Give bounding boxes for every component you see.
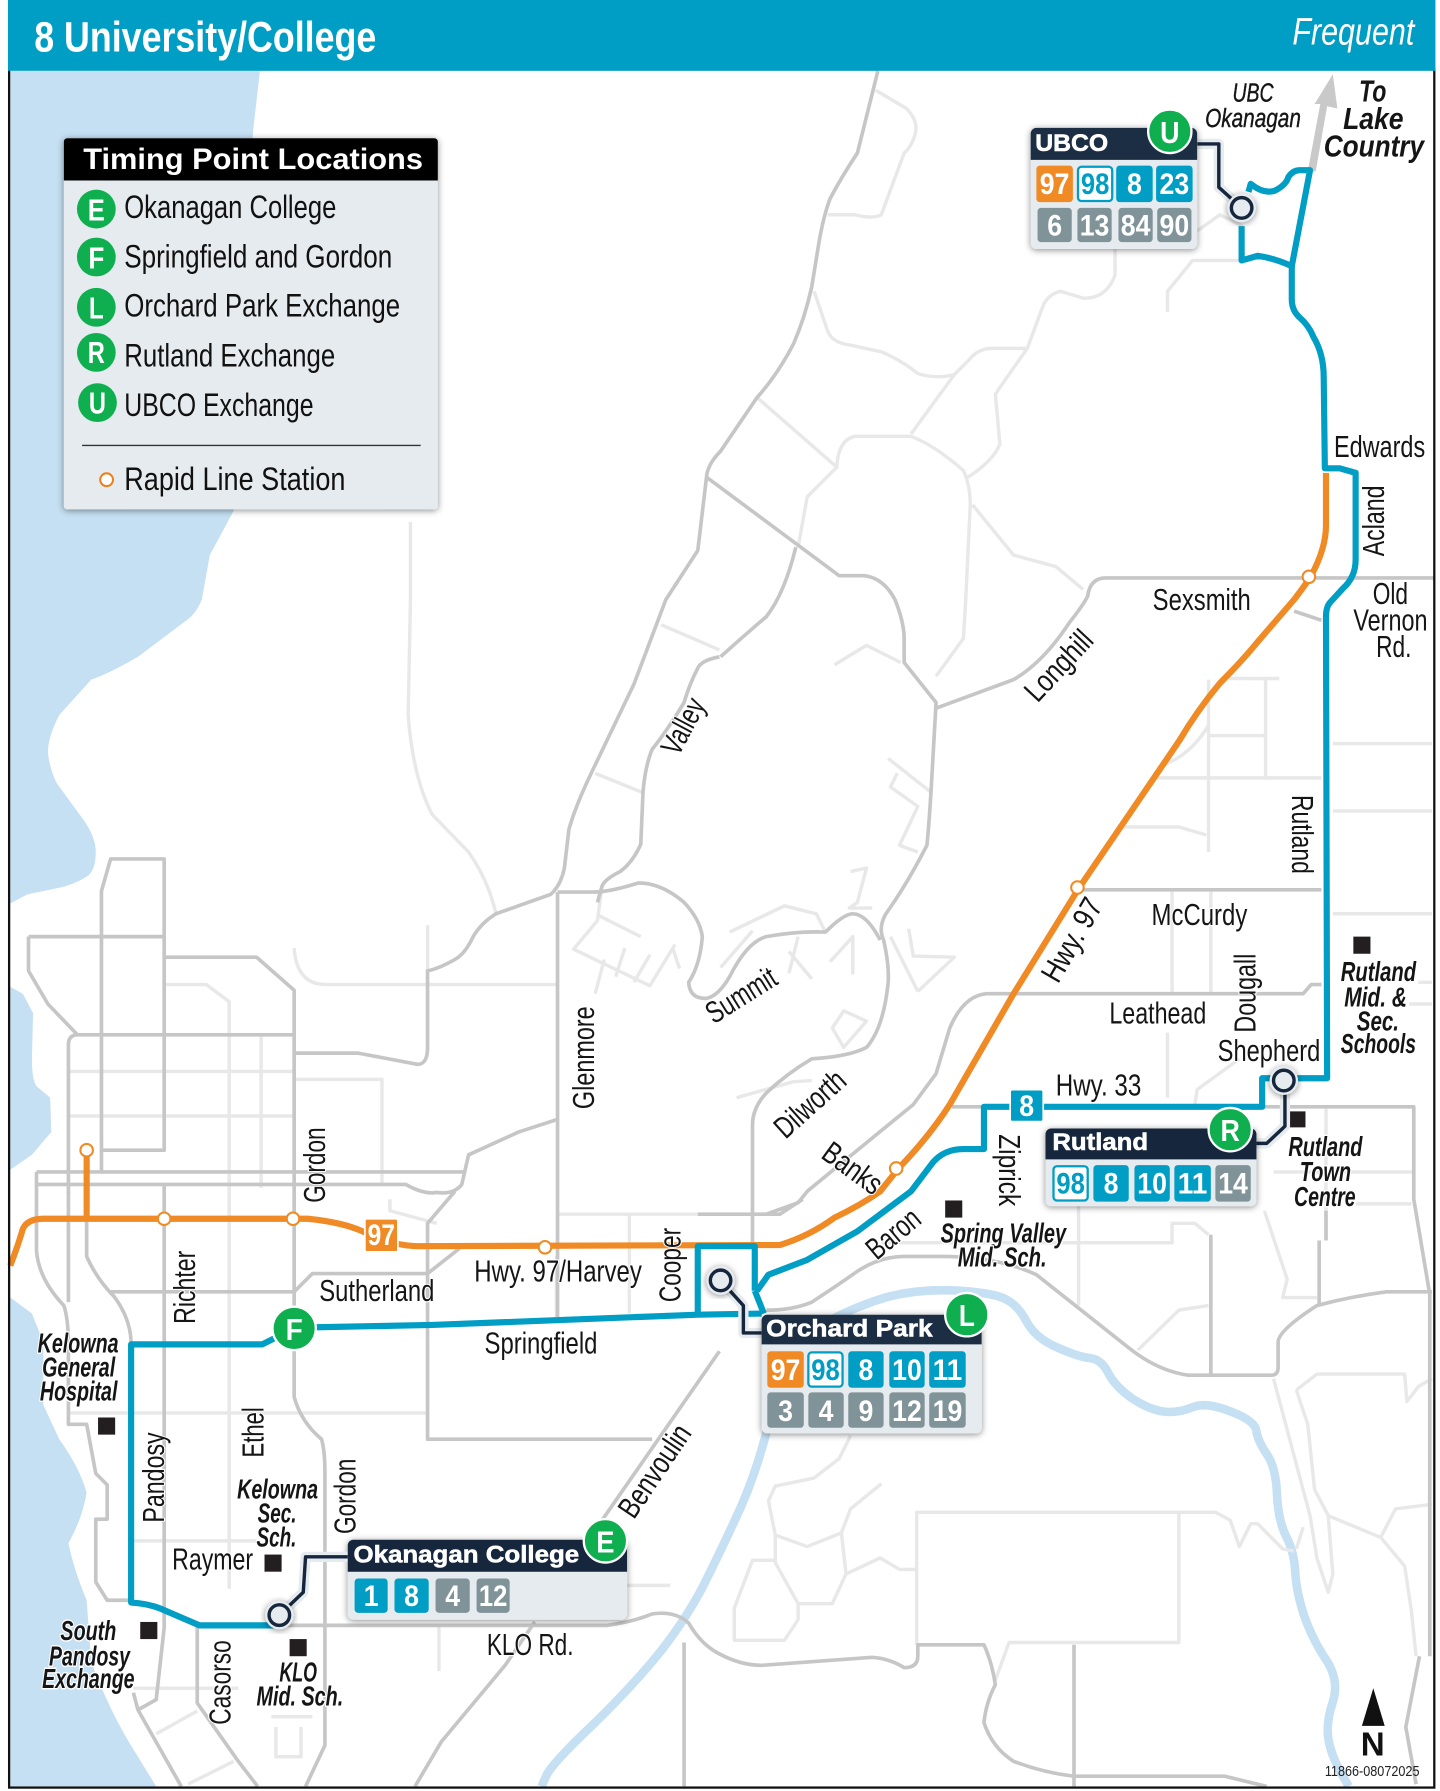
Rutland Town Centre [1288,1111,1363,1212]
service level: Frequent [1292,11,1416,53]
To Lake Country [1324,74,1426,163]
timing point badge R [1209,1108,1252,1151]
Banks: Banks [816,1134,890,1202]
arrow: to Lake Country [1308,74,1337,171]
South Pandosy Exchange [42,1615,157,1694]
Hwy. 97/Harvey: Hwy. 97/Harvey [474,1254,642,1289]
UBC Okanagan: UBC [1232,78,1274,108]
callout: UBCO [1031,110,1256,249]
timing point badge U [1148,110,1191,153]
legend panel: Timing Point Locations [64,138,438,509]
north arrow [1361,1688,1385,1764]
route 97 rapid line (orange) [10,473,1326,1266]
Glenmore: Glenmore [566,1006,601,1109]
route 8 line (blue) [131,170,1356,1625]
Baron: Baron [859,1201,928,1266]
callout: UBCO: 6 [1047,209,1062,242]
legend entry U: U [89,385,106,420]
legend entry R: Rutland Exchange [124,338,335,374]
legend entry R [77,333,335,374]
callout: Orchard Park: 8 [859,1354,873,1387]
Rutland Town Centre: Rutland [1288,1131,1363,1162]
KLO Middle School [257,1639,343,1711]
callout: Orchard Park: 11 [933,1354,962,1387]
Benvoulin: Benvoulin [611,1418,698,1524]
Kelowna General Hospital: Hospital [40,1375,118,1406]
KLO Middle School: Mid. Sch. [257,1680,343,1711]
callout: Orchard Park: 3 [778,1395,793,1428]
callout name: Okanagan College [353,1542,579,1569]
Spring Valley Middle School: Mid. Sch. [958,1242,1047,1273]
callout: Okanagan College: 8 [404,1580,419,1613]
callout: Orchard Park: 98 [811,1354,840,1387]
Kelowna General Hospital: General [42,1351,116,1382]
callout: Rutland [1046,1066,1298,1206]
Spring Valley Middle School: Spring Valley [941,1218,1067,1249]
timing point badge E: E [596,1524,615,1559]
legend entry L: L [89,291,104,326]
street labels [136,429,1427,1725]
Cooper: Cooper [653,1228,688,1302]
Summit: Summit [699,959,783,1031]
Kelowna General Hospital [38,1327,119,1435]
Hwy. 97: Hwy. 97 [1034,891,1110,988]
callout: UBCO: 8 [1127,168,1142,201]
To Lake Country: Country [1324,128,1426,163]
legend entry: rapid line station: Rapid Line Station [124,461,345,497]
callout: Okanagan College: 12 [479,1580,507,1613]
callout: UBCO: 98 [1081,168,1109,201]
Dilworth: Dilworth [767,1063,853,1145]
Rutland Town Centre: Centre [1294,1181,1356,1212]
callout: Orchard Park [706,1266,989,1433]
Old Vernon Rd. [1353,576,1427,664]
callout: Orchard Park: 4 [819,1395,834,1428]
callout: Orchard Park: 97 [771,1354,800,1387]
Casorso: Casorso [202,1640,237,1725]
Rutland Mid. and Sec. Schools [1341,937,1417,1059]
timing point badge F on route: F [286,1312,303,1347]
route 8 marker [1010,1090,1043,1123]
callout: Okanagan College: 1 [364,1580,379,1613]
timing point badge L: L [959,1298,975,1333]
callout: Okanagan College: 4 [445,1580,460,1613]
Gordon north: Gordon [297,1127,332,1203]
Acland: Acland [1356,485,1391,556]
Rutland Mid. and Sec. Schools: Mid. & [1344,981,1407,1012]
timing point badge L [945,1293,989,1336]
Ethel: Ethel [235,1407,270,1457]
Spring Valley Middle School [941,1200,1067,1273]
callout: Rutland: 98 [1056,1168,1085,1201]
callout: UBCO: 97 [1040,168,1069,201]
Ziprick: Ziprick [992,1134,1027,1207]
header bar [8,0,1435,71]
Old Vernon Rd.: Rd. [1376,629,1411,664]
legend entry E [77,189,336,228]
legend entry U [78,383,314,423]
legend entry F: Springfield and Gordon [124,238,392,274]
callout: Rutland: 8 [1104,1168,1118,1201]
Rutland Town Centre: Town [1300,1156,1351,1187]
To Lake Country: Lake [1343,101,1404,136]
Kelowna Secondary School: Sec. [258,1498,296,1529]
legend entry U: UBCO Exchange [124,387,314,423]
route 8 marker: 8 [1019,1090,1034,1123]
legend entry L [77,287,400,327]
McCurdy: McCurdy [1152,897,1248,932]
Shepherd: Shepherd [1218,1033,1320,1068]
Rutland road: Rutland [1285,795,1320,874]
callout: Orchard Park: 9 [859,1395,873,1428]
legend entry E: Okanagan College [124,189,336,225]
KLO Middle School: KLO [279,1656,317,1687]
Richter: Richter [167,1251,202,1324]
UBC Okanagan [1205,78,1301,133]
timing point badge E [584,1519,627,1563]
To Lake Country: To [1359,74,1386,109]
callout: UBCO: 23 [1160,168,1189,201]
Old Vernon Rd.: Old [1373,576,1408,611]
UBC Okanagan: Okanagan [1205,103,1301,133]
timing point badge U: U [1160,115,1179,150]
legend entry L: Orchard Park Exchange [124,287,400,323]
legend heading: Timing Point Locations [83,143,423,176]
South Pandosy Exchange: South [60,1615,116,1646]
legend entry F [77,238,392,276]
Springfield: Springfield [485,1326,597,1361]
callout name: Orchard Park [766,1315,933,1342]
Pandosy: Pandosy [136,1432,171,1523]
north arrow: N [1361,1727,1385,1764]
Hwy. 33: Hwy. 33 [1056,1067,1141,1102]
Sutherland: Sutherland [319,1273,434,1308]
callout: Orchard Park: 10 [892,1354,922,1387]
legend entry F: F [88,240,104,275]
South Pandosy Exchange: Exchange [42,1663,135,1694]
Rutland Mid. and Sec. Schools: Sec. [1357,1005,1399,1036]
Kelowna Secondary School [237,1474,318,1572]
legend entry R: R [88,335,105,370]
callout: Orchard Park: 12 [892,1395,922,1428]
callout: Okanagan College [265,1519,627,1629]
callout name: UBCO [1035,130,1108,157]
legend entry E: E [88,192,105,227]
callout: Rutland: 11 [1178,1168,1207,1201]
Leathead: Leathead [1109,995,1206,1030]
Gordon south: Gordon [328,1459,363,1534]
Kelowna Secondary School: Kelowna [237,1474,318,1505]
route 97 marker: 97 [368,1219,395,1252]
Longhill: Longhill [1017,623,1100,708]
timing point badge F on route [272,1307,316,1350]
Valley: Valley [654,691,713,761]
callout: Rutland: 14 [1218,1168,1248,1201]
callout: UBCO: 13 [1080,209,1109,242]
callout name: Rutland [1052,1129,1148,1156]
callout: UBCO: 90 [1160,209,1189,242]
Kelowna General Hospital: Kelowna [38,1327,119,1358]
Raymer: Raymer [172,1541,253,1576]
Dougall: Dougall [1227,954,1262,1033]
map code: 11866-08072025 [1325,1764,1419,1780]
Kelowna Secondary School: Sch. [257,1522,296,1553]
South Pandosy Exchange: Pandosy [49,1640,131,1671]
Rutland Mid. and Sec. Schools: Rutland [1341,956,1417,987]
callout: UBCO: 84 [1121,209,1151,242]
KLO Rd.: KLO Rd. [487,1627,573,1662]
Sexsmith: Sexsmith [1153,582,1251,617]
title: 8 University/College [34,13,376,60]
rapid line stations [80,571,1315,1254]
timing point badge R: R [1221,1113,1240,1148]
callout: Rutland: 10 [1137,1168,1167,1201]
callout: Orchard Park: 19 [933,1395,962,1428]
